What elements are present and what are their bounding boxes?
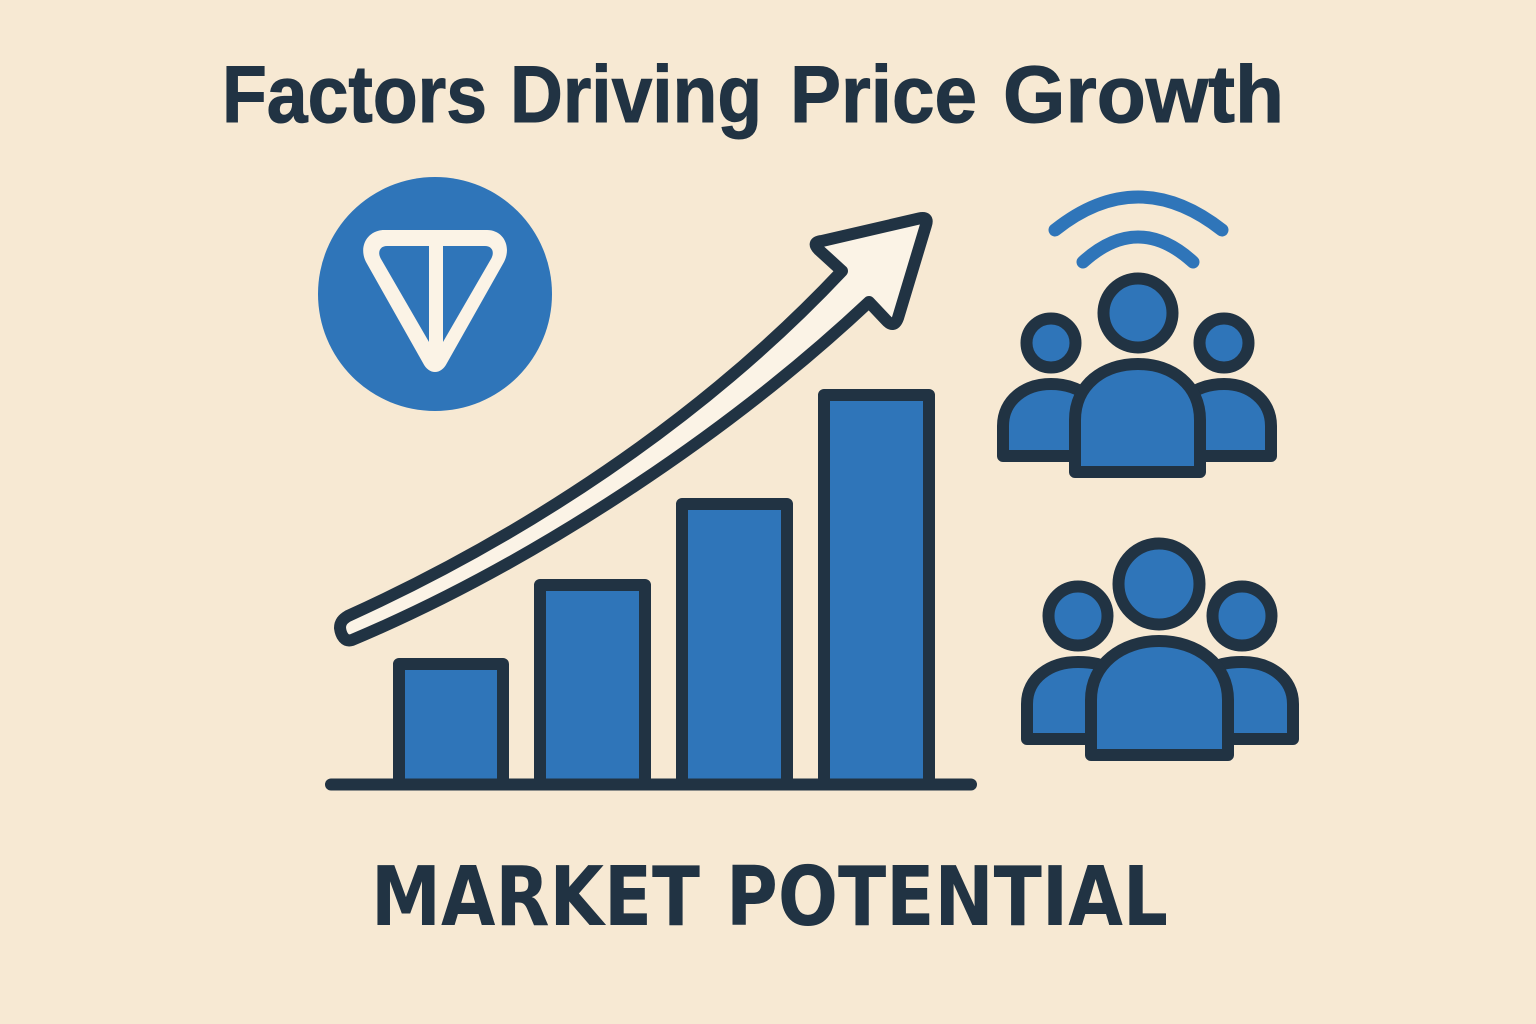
caption: market potential	[371, 850, 1168, 945]
bar 4	[824, 395, 929, 784]
caption: market potential: MARKET	[371, 850, 700, 945]
icon: community group	[1027, 544, 1293, 755]
centre person	[1075, 278, 1200, 472]
title	[222, 50, 1284, 140]
icon: TON coin logo	[318, 177, 552, 411]
title: Driving	[510, 50, 762, 140]
bar 3	[682, 504, 787, 784]
title: Factors	[222, 50, 487, 140]
bar 2	[540, 585, 645, 784]
bar chart	[331, 395, 971, 784]
title: Price	[790, 50, 977, 140]
title: Growth	[1003, 50, 1284, 140]
right person	[1185, 318, 1271, 456]
centre person	[1091, 544, 1228, 755]
growth arrow	[340, 218, 927, 640]
icon: wifi signal arcs	[1055, 197, 1222, 262]
icon: connected community group	[1003, 278, 1271, 472]
axis baseline	[331, 778, 971, 790]
right person	[1205, 586, 1293, 739]
caption: market potential: POTENTIAL	[726, 850, 1168, 945]
left person	[1003, 318, 1090, 456]
left person	[1027, 586, 1115, 739]
bar 1	[399, 664, 503, 784]
